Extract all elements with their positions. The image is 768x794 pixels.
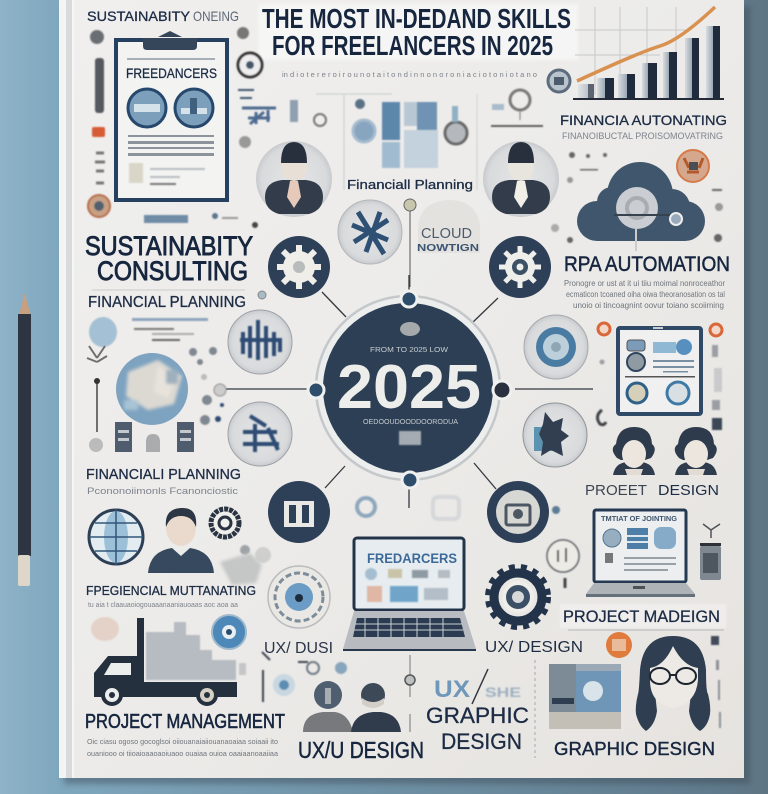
people: two users <box>303 681 401 732</box>
icon: cloud <box>577 162 705 251</box>
cloud side details <box>551 152 723 243</box>
icon: potted plant device <box>700 524 721 580</box>
clipboard details <box>129 163 205 185</box>
icon: woman with glasses <box>636 636 710 731</box>
clipboard portraits <box>128 89 213 127</box>
heading: financial automating lower: FPEGIENCIAL MUTTANATING <box>86 583 256 598</box>
clipboard text lines <box>128 135 214 156</box>
icon: financial circles left <box>228 310 292 466</box>
keyboard <box>353 618 465 637</box>
panel: financial planning illustration <box>87 317 226 452</box>
icon: dark emblem circle <box>523 403 587 467</box>
chart: rising bars <box>573 7 724 100</box>
heading: sustainability consulting <box>85 231 253 286</box>
heading: UX slash: UX <box>434 676 470 703</box>
callout: cloud node: NOWTIGN <box>417 243 479 254</box>
globe <box>116 353 188 425</box>
panel: center laptop <box>343 538 476 651</box>
subtext: financial planning lower: Pcononoiimonls Fcanonciostic <box>87 486 239 496</box>
icon: compass circle <box>268 566 330 628</box>
medallion lower icon <box>399 431 421 445</box>
heading: sustainability consulting: CONSULTING <box>97 256 248 286</box>
icon: person left <box>256 141 332 217</box>
connector: vertical with node <box>405 655 415 732</box>
icon: dark circle bottom right <box>487 481 549 543</box>
left margin icons <box>88 30 110 217</box>
heading: project madeign: PROJECT MADEIGN <box>563 607 720 626</box>
heading: project design <box>585 482 719 499</box>
icon: pencil <box>18 293 31 586</box>
icon: small badge by chart <box>548 70 570 92</box>
person <box>148 548 214 573</box>
screen heading: FREDARCERS <box>367 551 457 566</box>
icon: orange badge small <box>606 632 632 658</box>
medallion year: 2025 <box>337 353 481 422</box>
heading: UX slash: SHE <box>485 684 521 700</box>
icon: blue disc <box>212 615 246 649</box>
label: UX/ design: UX/ DESIGN <box>485 639 583 656</box>
medallion small label: FROM TO 2025 LOW <box>370 347 448 354</box>
heading: sustainability top: ONEING <box>193 8 239 24</box>
top middle small icons <box>144 27 326 228</box>
title <box>258 3 578 61</box>
subtext: project management <box>87 737 279 758</box>
heading: sustainability consulting: SUSTAINABITY <box>85 231 253 261</box>
heading: graphic design stacked: DESIGN <box>441 729 522 754</box>
heading: sustainability top: SUSTAINABITY <box>87 8 191 24</box>
top middle blue panel <box>316 90 543 190</box>
title: THE MOST IN-DEDAND SKILLS <box>262 3 571 34</box>
panel: truck <box>91 617 237 706</box>
panel: clipboard <box>116 31 227 200</box>
icon: orange badge <box>677 150 709 182</box>
tablet side icons <box>597 323 722 430</box>
subtext: RPA automation: Pronogre or ust at it ui tiiu moimal nonroceathor <box>564 279 725 288</box>
subtext: financial automating lower: tu aia t claauaoiogouaaanaaniauoaas aoc aoa aa <box>88 602 238 609</box>
label: UX/ DUSI: UX/ DUSI <box>264 640 333 657</box>
side dots <box>189 347 226 425</box>
subtext: financial automating: FINANOIBUCTAL PROISOMOVATRING <box>562 131 723 141</box>
icon: illustrated circle top <box>338 200 402 264</box>
clipboard label: FREEDANCERS <box>126 65 217 81</box>
gear node top right <box>489 236 551 298</box>
icon: blurred shell <box>220 553 262 585</box>
callout: cloud node <box>404 199 480 287</box>
subtext: RPA automation: unoio oi tincoagnint oovur toiano scoiiming <box>573 301 724 310</box>
heading: project design: PROEET <box>585 482 647 499</box>
heading: UX/U design: UX/U DESIGN <box>298 737 424 763</box>
callout: cloud node: CLOUD <box>421 225 472 242</box>
medallion nodes <box>308 291 511 488</box>
heading: RPA automation: RPA AUTOMATION <box>564 253 730 276</box>
screen widgets <box>365 568 450 602</box>
center medallion <box>316 296 500 480</box>
heading: UX slash <box>434 669 521 704</box>
small swirl icons <box>240 497 579 588</box>
panel: graph dots near truck <box>239 652 347 702</box>
screen header text: TMTIAT OF JOINTING <box>601 516 678 523</box>
subtitle line: in d i o t e r e r o i r o u n o t a i t o n d i n n o n o r o n i a c i o t o n i o t a n o <box>282 72 537 79</box>
medallion top icon <box>400 322 420 336</box>
subtext: project management: ouaniooo oi tiioaioaaoaoiuaoo ouaiaa ouioa oaaiaanoaaiiaa <box>87 749 279 758</box>
panel: person with globe <box>89 508 239 573</box>
icon: blue target circle <box>524 315 588 379</box>
icon: large gear <box>488 567 548 627</box>
people: two women <box>613 427 717 475</box>
heading: financial planning lower: FINANCIALI PLANNING <box>86 466 241 483</box>
document strip <box>89 317 208 347</box>
heading: graphic design stacked <box>426 703 529 754</box>
panel: tablet <box>618 327 701 414</box>
icon: person right <box>483 141 559 217</box>
plant <box>87 346 107 432</box>
woman side details <box>711 636 721 728</box>
heading: graphic design stacked: GRAPHIC <box>426 703 529 728</box>
icon: dark circle bottom left <box>268 481 330 543</box>
heading: financial automating: FINANCIA AUTONATING <box>560 112 727 128</box>
heading: project design: DESIGN <box>658 482 719 499</box>
heading: sustainability top <box>87 8 239 24</box>
gear node top left <box>268 236 330 298</box>
divider by graphic design <box>534 660 536 758</box>
towers <box>115 422 194 452</box>
heading: graphic design: GRAPHIC DESIGN <box>554 739 715 759</box>
medallion caption: OEDOOUDOODDOORODUA <box>363 419 458 426</box>
text: financial planning middle: Financiall Planning <box>347 177 473 192</box>
subtext: project management: Oic ciasu ogoso gocoglsoi oiiouanaiaiiouanaoaiaa soiaaii ito <box>87 737 278 746</box>
screen widgets <box>603 527 676 571</box>
title: FOR FREELANCERS IN 2025 <box>272 30 553 61</box>
heading: project management: PROJECT MANAGEMENT <box>85 711 285 733</box>
subtext: RPA automation <box>564 279 725 310</box>
connectors <box>226 275 593 508</box>
heading: financial planning upper: FINANCIAL PLANNING <box>88 294 246 311</box>
subtext: RPA automation: ecmaticon tcoaned oiha oiwa theoranosation os tal <box>566 290 725 299</box>
globe icon <box>89 510 143 564</box>
panel: right laptop <box>586 510 695 597</box>
panel: graphic image <box>549 664 621 729</box>
gear <box>211 509 239 537</box>
